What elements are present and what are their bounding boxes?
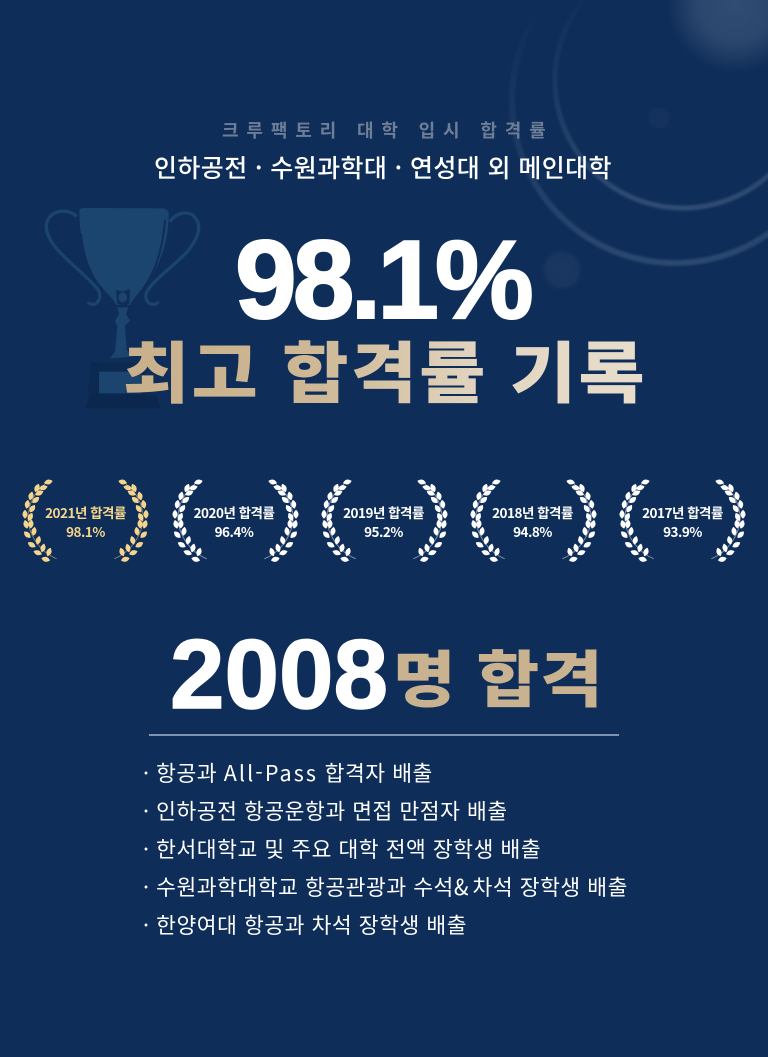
badge: 2021 pass rate: 98.1% [66,521,105,541]
main figure: 98.1% [235,218,530,342]
badge: 2019 pass rate [322,480,448,562]
achievements list: · 인하공전 항공운항과 면접 만점자 배출 [143,795,508,826]
badge: 2018 pass rate: 2018년 합격률 [492,502,573,522]
badge: 2018 pass rate: 94.8% [513,521,552,541]
badge: 2017 pass rate: 93.9% [663,521,702,541]
badge: 2019 pass rate: 95.2% [364,521,403,541]
badge: 2020 pass rate: 2020년 합격률 [194,502,274,522]
badge: 2020 pass rate [172,480,298,562]
badge: 2021 pass rate: 2021년 합격률 [45,502,126,522]
badge: 2021 pass rate [22,480,148,562]
achievements list [143,757,628,940]
achievements list: · 한서대학교 및 주요 대학 전액 장학생 배출 [143,833,541,864]
badge: 2019 pass rate: 2019년 합격률 [343,502,424,522]
achievements list: · 항공과 All-Pass 합격자 배출 [143,757,433,788]
badge: 2017 pass rate [620,480,746,562]
badge: 2017 pass rate: 2017년 합격률 [642,502,723,522]
achievements list: · 한양여대 항공과 차석 장학생 배출 [143,909,467,940]
subheading: 인하공전 · 수원과학대 · 연성대 외 메인대학 [154,149,612,185]
badge: 2020 pass rate: 96.4% [215,521,253,541]
eyebrow heading: 크루팩토리 대학 입시 합격률 [222,117,554,143]
main headline: 최고 합격률 기록 [123,320,647,416]
total passers label: 명 합격 [393,630,604,720]
icon: trophy [44,208,200,408]
total passers figure: 2008 [170,619,388,729]
achievements list: · 수원과학대학교 항공관광과 수석&차석 장학생 배출 [143,871,628,902]
badge: 2018 pass rate [470,480,596,562]
